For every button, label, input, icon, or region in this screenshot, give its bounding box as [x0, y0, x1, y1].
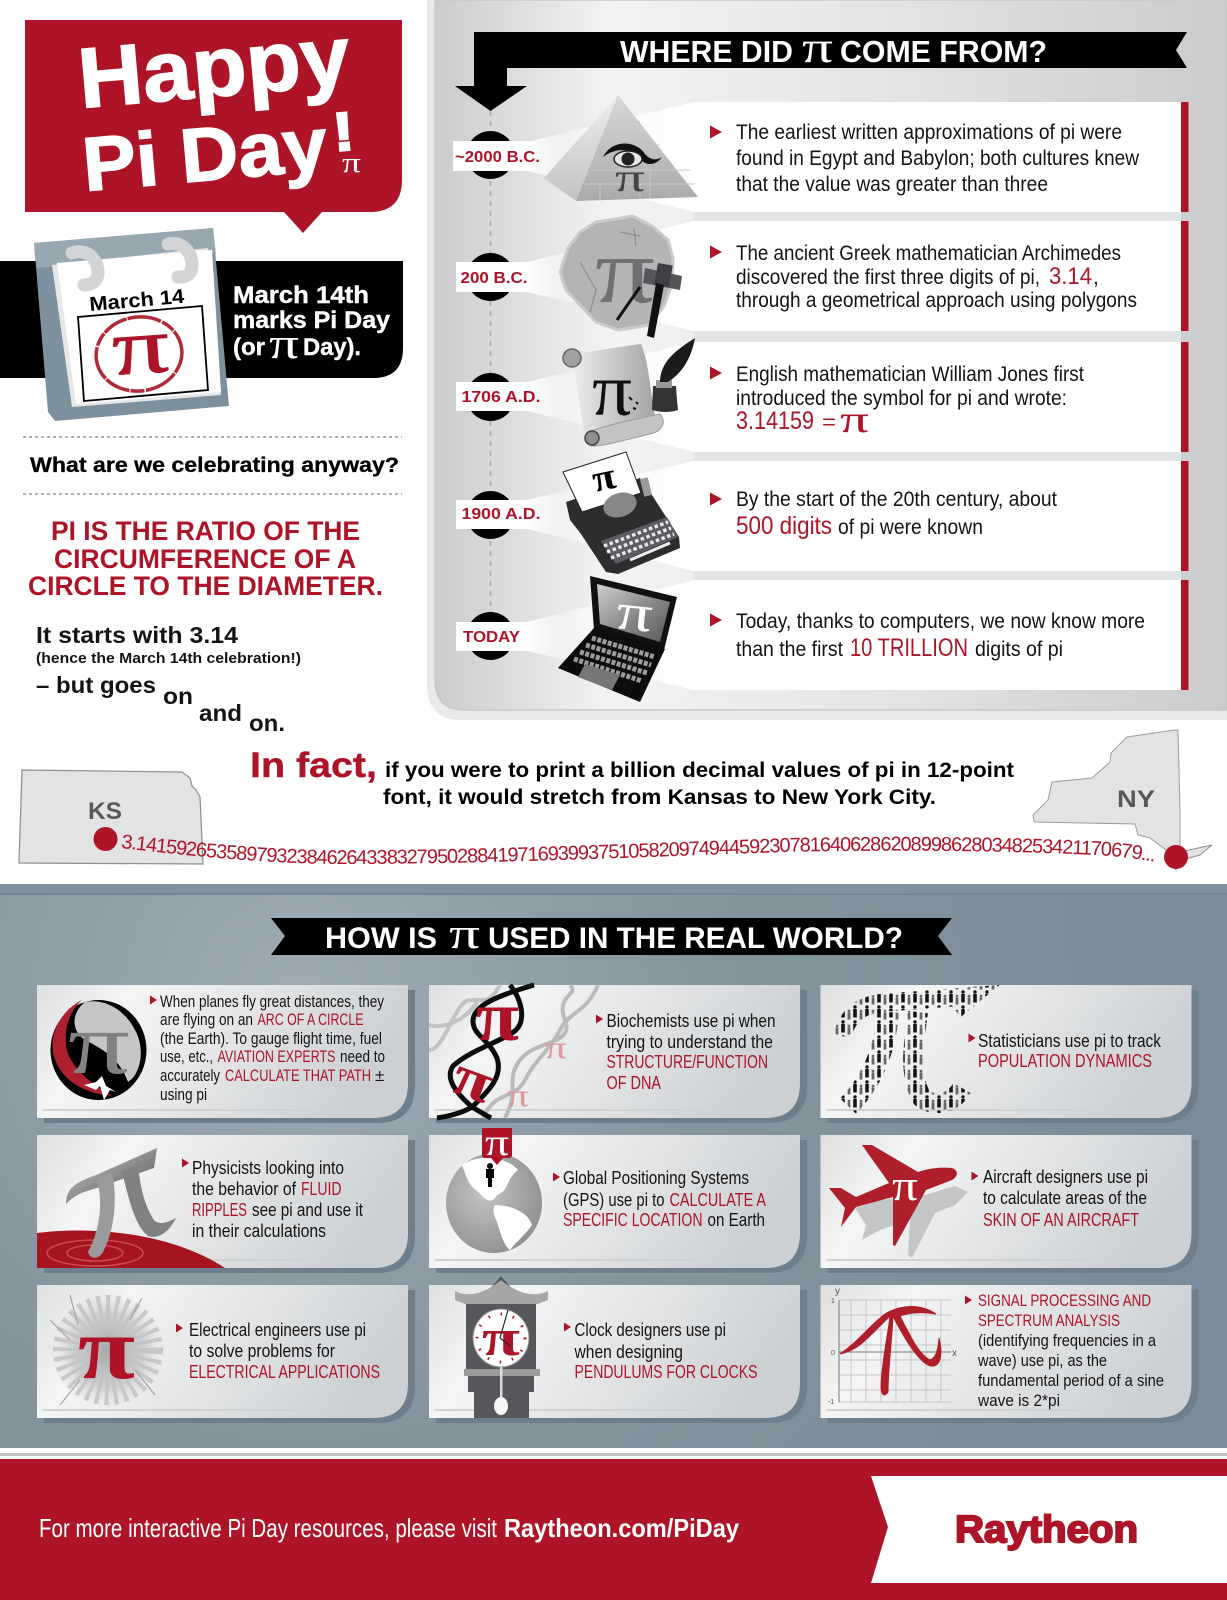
row 3 text: = — [822, 411, 836, 434]
card text: SPECIFIC LOCATION — [563, 1209, 702, 1230]
card: electrical — [37, 1285, 415, 1423]
icon: calendar: π — [109, 301, 172, 393]
icon: laptop — [558, 576, 677, 702]
card text: When planes fly great distances, they — [160, 992, 384, 1011]
row 4 text: of pi were known — [838, 516, 983, 539]
card text: wave is 2*pi — [977, 1391, 1060, 1410]
row 1 text — [710, 121, 1140, 196]
card text: AVIATION EXPERTS — [218, 1047, 336, 1066]
header ribbon: where did pi come from — [455, 23, 1187, 111]
card text: ELECTRICAL APPLICATIONS — [189, 1361, 380, 1382]
icon: graph with pi curve: -1 — [828, 1399, 834, 1406]
card: aviation — [37, 985, 415, 1123]
icon: globe with flight arc: π — [68, 996, 130, 1093]
icon: calendar — [34, 228, 229, 421]
icon: pi made of people — [842, 996, 972, 1106]
card text: accurately — [160, 1066, 220, 1085]
icon: red plane with shadow — [829, 1145, 968, 1258]
card text: PENDULUMS FOR CLOCKS — [574, 1361, 758, 1382]
card text: are flying on an — [160, 1010, 253, 1029]
card text: fundamental period of a sine — [978, 1371, 1164, 1390]
icon: globe with location pin: π — [485, 1122, 509, 1164]
text block: definition of pi: CIRCLE TO THE DIAMETER. — [28, 571, 383, 601]
timeline dot and date label: 200 B.C. — [460, 270, 528, 287]
banner text line 1: March 14th — [233, 282, 369, 309]
timeline row 2 — [456, 216, 1188, 342]
card text: Global Positioning Systems — [563, 1167, 749, 1188]
card text: POPULATION DYNAMICS — [978, 1050, 1152, 1071]
card text: SIGNAL PROCESSING AND — [978, 1291, 1151, 1310]
icon: DNA helix: π — [545, 1029, 567, 1065]
timeline row 5 — [456, 576, 1188, 702]
row 2 text: discovered the first three digits of pi, — [736, 266, 1040, 289]
card text: Biochemists use pi when — [606, 1010, 776, 1031]
timeline dot and date label — [453, 131, 540, 179]
icon: pyramid with eye: π — [615, 155, 645, 200]
row 5 text: Today, thanks to computers, we now know more — [736, 610, 1145, 633]
timeline dot and date label: TODAY — [463, 629, 520, 646]
banner text line 3 — [233, 321, 361, 368]
card text: to calculate areas of the — [983, 1187, 1147, 1208]
icon: scroll with quill and inkwell: π — [592, 350, 632, 432]
row 3 text: π — [840, 399, 869, 441]
banner text line 2: marks Pi Day — [233, 307, 391, 334]
card text: SPECTRUM ANALYSIS — [978, 1311, 1120, 1330]
banner text line 3: π — [269, 321, 299, 368]
row 2 text: through a geometrical approach using polygons — [736, 289, 1137, 312]
card text — [968, 1030, 1162, 1071]
footer logo banner: Raytheon — [955, 1509, 1138, 1551]
footer call to action: Raytheon.com/PiDay — [504, 1513, 739, 1543]
header ribbon: where did pi come from: WHERE DID — [620, 34, 793, 69]
card text: ARC OF A CIRCLE — [258, 1010, 364, 1029]
icon: graph with pi curve — [828, 1286, 957, 1406]
icon: graph with pi curve: 0 — [831, 1350, 835, 1357]
card: signal processing — [820, 1285, 1198, 1423]
icon: globe with location pin — [446, 1122, 542, 1253]
card text: Aircraft designers use pi — [983, 1166, 1148, 1187]
card: aircraft — [820, 1135, 1198, 1273]
icon: graph with pi curve: 1 — [831, 1298, 835, 1305]
timeline dot and date label: ~2000 B.C. — [455, 149, 540, 166]
row 2 text: 3.14 — [1049, 263, 1092, 290]
card text: (the Earth). To gauge flight time, fuel — [160, 1029, 382, 1048]
row 5 text: than the first — [736, 638, 843, 661]
card text — [972, 1166, 1148, 1230]
row 2 text: The ancient Greek mathematician Archimedes — [736, 242, 1121, 265]
panel: where did pi come from background — [427, 0, 1227, 720]
icon: grandfather clock: π — [482, 1310, 520, 1367]
icon: calendar: March 14 — [89, 286, 186, 316]
timeline dot and date label — [456, 612, 529, 660]
icon: graph with pi curve: x — [952, 1348, 957, 1359]
card text: on Earth — [708, 1209, 765, 1230]
footer logo banner — [871, 1476, 1227, 1583]
card: statistics — [820, 985, 1198, 1123]
text block: definition of pi — [28, 516, 383, 601]
card text: Statisticians use pi to track — [978, 1030, 1162, 1051]
icon: typewriter: π — [588, 455, 620, 501]
row 3 text — [710, 363, 1084, 441]
card text — [176, 1319, 380, 1382]
timeline dot and date label — [456, 373, 540, 421]
icon: electric burst with pi: π — [78, 1301, 135, 1398]
icon: laptop: π — [614, 583, 656, 644]
row 5 text: 10 TRILLION — [850, 634, 968, 662]
timeline dot and date label — [456, 253, 529, 301]
card text: RIPPLES — [192, 1199, 247, 1220]
card text: Electrical engineers use pi — [189, 1319, 366, 1340]
icon: DNA helix — [429, 979, 598, 1118]
footer: red band — [0, 1453, 1227, 1600]
timeline dot and date label: 1706 A.D. — [462, 389, 540, 406]
card text: use, etc., — [160, 1047, 213, 1066]
card text: need to — [340, 1047, 385, 1066]
row 3 text: 3.14159 — [736, 407, 814, 435]
banner: March 14th marks Pi Day — [0, 261, 403, 378]
card text: FLUID — [301, 1178, 342, 1199]
header ribbon: where did pi come from: π — [802, 23, 833, 72]
title line: Pi Day: Pi Day — [79, 102, 331, 208]
row 3 text: English mathematician William Jones first — [736, 363, 1084, 386]
timeline row 4 — [456, 452, 1188, 580]
text block: definition of pi: PI IS THE RATIO OF THE — [51, 516, 360, 546]
banner text line 3: Day). — [303, 334, 361, 361]
icon: scroll with quill and inkwell — [563, 338, 695, 446]
card text — [564, 1319, 758, 1382]
card text: OF DNA — [606, 1072, 662, 1093]
timeline row 1 — [453, 95, 1188, 221]
header ribbon: how is pi used — [271, 911, 952, 958]
card text — [150, 992, 385, 1104]
text block: it starts with 3.14: – but goes — [36, 672, 156, 698]
footer call to action: For more interactive Pi Day resources, please visit — [39, 1513, 498, 1543]
title bubble: Happy Pi Day — [25, 9, 402, 233]
subheading: what are we celebrating: What are we celebrating anyway? — [30, 454, 399, 477]
card: biochemistry — [429, 979, 807, 1123]
card text: Physicists looking into — [192, 1157, 344, 1178]
header ribbon: how is pi used: π — [449, 911, 480, 958]
row 4 text — [710, 488, 1057, 540]
icon: graph with pi curve: y — [835, 1286, 840, 1297]
card: clock — [429, 1276, 807, 1423]
row 1 text: that the value was greater than three — [736, 173, 1048, 196]
pi digits stretching between states: 3.1415926535897932384626433832795028841971693993751058209749445923078164062862089986280348253421170679... — [122, 834, 1154, 864]
card text: when designing — [574, 1341, 683, 1362]
in fact text: font, it would stretch from Kansas to New York City. — [383, 786, 936, 809]
icon: DNA helix: π — [507, 1077, 529, 1113]
text block: it starts with 3.14: and — [199, 700, 242, 726]
card text: STRUCTURE/FUNCTION — [606, 1051, 768, 1072]
card text — [553, 1167, 767, 1230]
icon: globe with flight arc — [50, 996, 146, 1100]
card text: the behavior of — [192, 1178, 297, 1199]
row 1 text: found in Egypt and Babylon; both cultures knew — [736, 147, 1140, 170]
icon: grandfather clock — [455, 1276, 548, 1418]
section: how is pi used background — [0, 884, 1227, 1448]
card text: to solve problems for — [189, 1340, 335, 1361]
icon: pyramid with eye — [544, 95, 698, 201]
text block: it starts with 3.14: on — [163, 683, 193, 709]
row 2 text — [710, 242, 1137, 312]
icon: DNA helix: π — [444, 1042, 503, 1116]
timeline dashed line — [490, 111, 492, 625]
card text — [965, 1291, 1164, 1410]
in fact text: In fact, — [250, 746, 377, 785]
map: Kansas — [19, 770, 203, 864]
timeline row 3 — [456, 338, 1188, 461]
row 2 text: , — [1093, 266, 1099, 289]
card: GPS — [429, 1122, 807, 1273]
card text: see pi and use it — [252, 1199, 363, 1220]
icon: typewriter — [563, 452, 680, 574]
text block: it starts with 3.14 — [36, 622, 301, 736]
card text: CALCULATE THAT PATH — [225, 1066, 371, 1085]
card text: (GPS) use pi to — [563, 1189, 664, 1210]
timeline dot and date label: 1900 A.D. — [462, 506, 540, 523]
card text: trying to understand the — [606, 1031, 773, 1052]
row 1 text: The earliest written approximations of pi were — [736, 121, 1122, 144]
icon: DNA helix: π — [476, 979, 519, 1056]
row 3 text: introduced the symbol for pi and wrote: — [736, 387, 1067, 410]
card text: ± — [375, 1066, 384, 1085]
card text: (identifying frequencies in a — [978, 1331, 1156, 1350]
card: fluid ripples — [37, 1135, 415, 1273]
in fact text: if you were to print a billion decimal values of pi in 12-point — [385, 759, 1014, 782]
row 5 text — [710, 610, 1145, 662]
icon: red plane with shadow: π — [892, 1163, 918, 1210]
card text: in their calculations — [192, 1220, 326, 1241]
map: New York: NY — [1117, 786, 1155, 813]
header ribbon: how is pi used: HOW IS — [325, 922, 437, 955]
small pi: π — [342, 147, 361, 179]
card text: Clock designers use pi — [574, 1319, 726, 1340]
text block: it starts with 3.14: It starts with 3.14 — [36, 622, 238, 648]
text block: it starts with 3.14: (hence the March 14th celebration!) — [36, 650, 301, 667]
card text: wave) use pi, as the — [977, 1351, 1107, 1370]
in fact text — [250, 746, 1014, 809]
banner text line 3: (or — [233, 334, 265, 361]
icon: pi splashing into red fluid — [37, 1148, 225, 1268]
text block: it starts with 3.14: on. — [249, 710, 285, 736]
row 4 text: 500 digits — [736, 512, 832, 540]
header ribbon: how is pi used: USED IN THE REAL WORLD? — [488, 922, 903, 955]
exclamation mark: ! — [331, 101, 356, 163]
icon: stone tablet and hammer: π — [595, 220, 655, 323]
card text: CALCULATE A — [670, 1189, 767, 1210]
card text — [182, 1157, 363, 1241]
text block: definition of pi: CIRCUMFERENCE OF A — [54, 544, 356, 574]
icon: electric burst with pi — [48, 1288, 168, 1412]
row 4 text: By the start of the 20th century, about — [736, 488, 1057, 511]
title line: Happy: Happy — [74, 9, 354, 127]
card text: using pi — [160, 1085, 207, 1104]
row 5 text: digits of pi — [975, 638, 1063, 661]
card text: SKIN OF AN AIRCRAFT — [983, 1209, 1139, 1230]
card text — [596, 1010, 776, 1093]
header ribbon: where did pi come from: COME FROM? — [840, 34, 1047, 69]
map: Kansas: KS — [88, 798, 122, 825]
icon: stone tablet and hammer — [560, 216, 682, 338]
timeline dot and date label — [456, 491, 540, 539]
map: New York — [1033, 730, 1212, 870]
